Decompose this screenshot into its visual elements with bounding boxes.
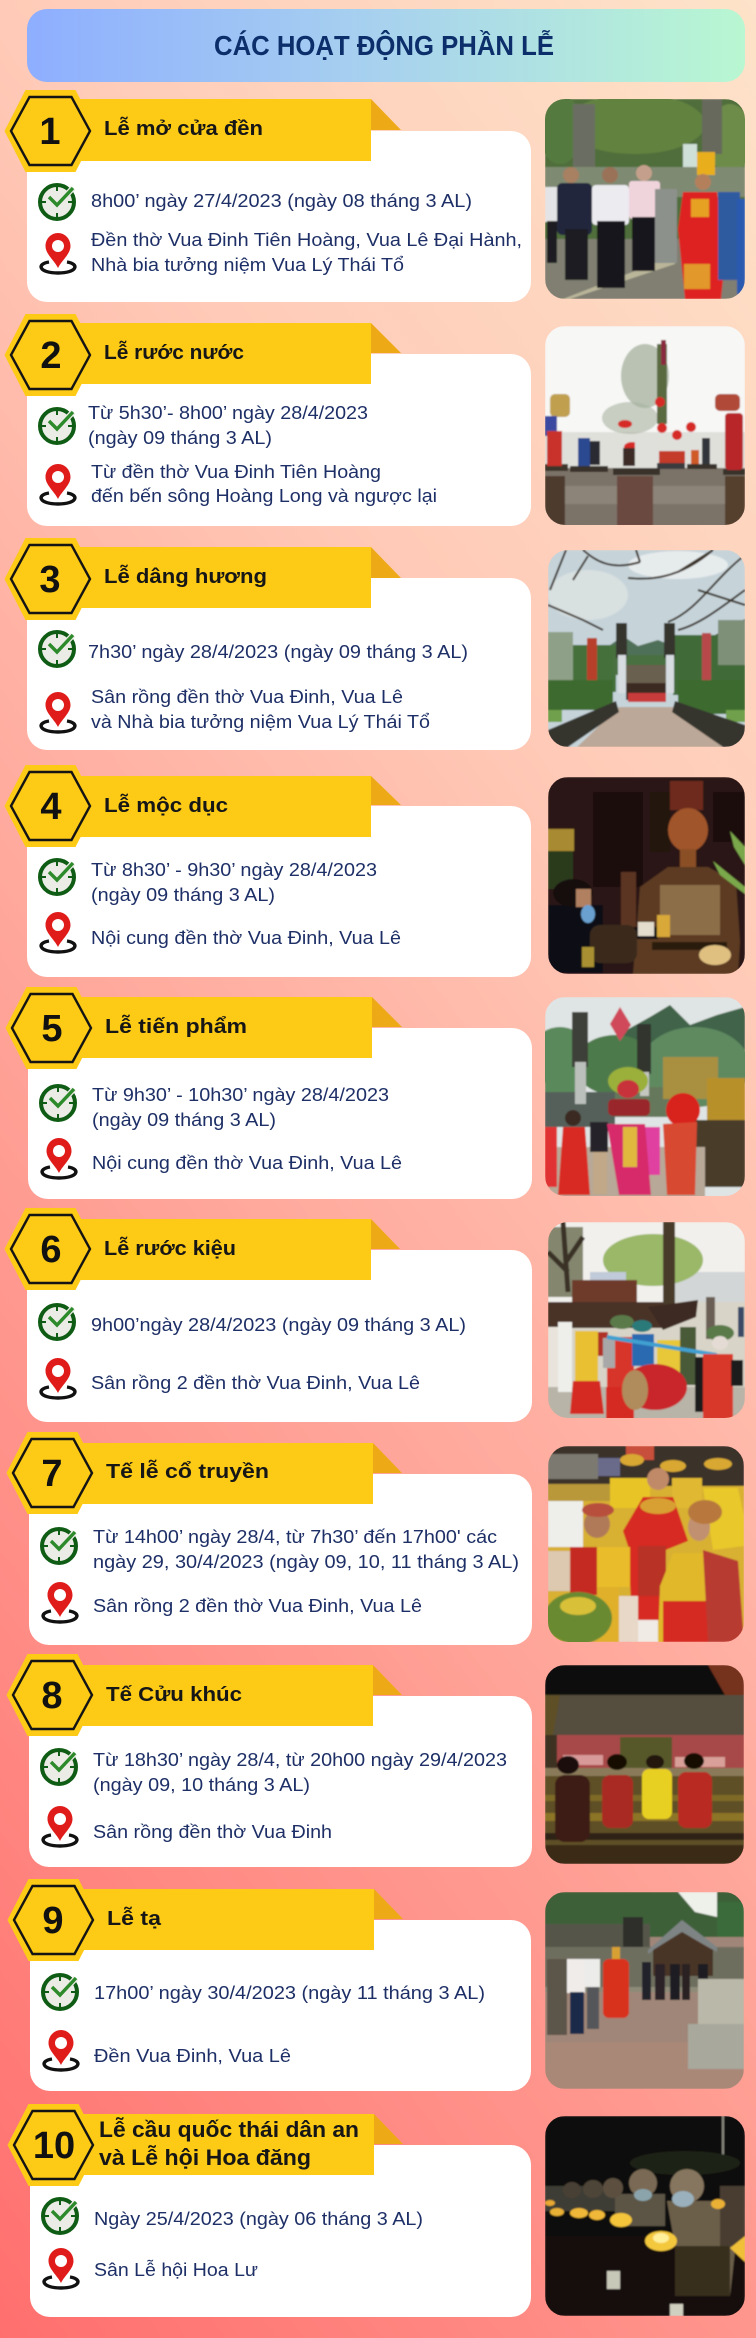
ribbon: [60, 99, 371, 161]
ribbon fold: [371, 776, 401, 805]
location text: [91, 462, 437, 506]
location text: Sân Lễ hội Hoa Lư: [94, 2259, 258, 2280]
ribbon: [60, 1219, 371, 1280]
ribbon fold: [374, 1889, 403, 1919]
panel: activity 6: [4, 1208, 745, 1422]
heading: Lễ cầu quốc thái dân an: [99, 2117, 359, 2142]
location text: Nhà bia tưởng niệm Vua Lý Thái Tổ: [91, 255, 404, 275]
photo: traditional ritual performers: [544, 1446, 744, 1644]
icon: location pin: [42, 1138, 76, 1178]
ribbon: [62, 1443, 373, 1504]
icon: clock: [40, 409, 74, 443]
heading: Lễ tiến phẩm: [105, 1014, 247, 1038]
time text: (ngày 09 tháng 3 AL): [88, 428, 272, 448]
panel: activity 3: [4, 538, 745, 750]
heading: Lễ mộc dục: [104, 793, 228, 817]
time text: Từ 14h00’ ngày 28/4, từ 7h30’ đến 17h00' các: [93, 1527, 497, 1547]
heading: Lễ rước nước: [104, 340, 244, 364]
icon: location pin: [44, 2030, 78, 2070]
icon: location pin: [44, 2248, 78, 2288]
icon: clock: [40, 632, 74, 666]
number badge: 10: [33, 2125, 75, 2167]
ribbon fold: [372, 997, 402, 1027]
card: [29, 1696, 532, 1867]
ribbon: [63, 1889, 374, 1950]
panel: activity 4: [4, 765, 745, 977]
icon: location pin: [41, 1358, 75, 1398]
time text: 7h30’ ngày 28/4/2023 (ngày 09 tháng 3 AL): [88, 642, 468, 662]
number badge: 2: [40, 335, 62, 377]
number badge: [6, 1432, 98, 1514]
ribbon fold: [373, 1443, 402, 1473]
location text: Đền thờ Vua Đinh Tiên Hoàng, Vua Lê Đại Hành,: [91, 230, 522, 250]
number badge: [6, 1654, 98, 1736]
icon: clock: [43, 2199, 77, 2233]
location text: Từ đền thờ Vua Đinh Tiên Hoàng: [91, 462, 381, 482]
time text: Từ 8h30’ - 9h30’ ngày 28/4/2023: [91, 860, 377, 880]
number badge: 9: [42, 1900, 64, 1942]
heading: Lễ mở cửa đền: [104, 116, 263, 140]
card: [30, 1920, 531, 2091]
photo: offering procession: [530, 997, 750, 1197]
ribbon fold: [373, 1665, 402, 1695]
number badge: 3: [39, 559, 61, 601]
heading: Lễ rước kiệu: [104, 1236, 236, 1260]
location text: đến bến sông Hoàng Long và ngược lại: [91, 486, 437, 506]
location text: Sân rồng đền thờ Vua Đinh, Vua Lê: [91, 687, 403, 707]
number badge: 8: [41, 1675, 63, 1717]
number badge: 5: [41, 1008, 63, 1050]
icon: clock: [40, 1305, 74, 1339]
icon: clock: [42, 1529, 76, 1563]
heading: Lễ tạ: [107, 1906, 162, 1930]
ribbon fold: [371, 547, 401, 578]
location text: Nội cung đền thờ Vua Đinh, Vua Lê: [91, 928, 401, 948]
ribbon: [60, 776, 371, 837]
card: [27, 578, 531, 750]
number badge: 1: [39, 111, 61, 153]
heading: Tế lễ cổ truyền: [106, 1459, 269, 1483]
icon: location pin: [43, 1582, 77, 1622]
icon: location pin: [43, 1806, 77, 1846]
panel: activity 7: [6, 1432, 744, 1645]
time text: Từ 18h30’ ngày 28/4, từ 20h00 ngày 29/4/2023: [93, 1750, 507, 1770]
photo: officials and costumed man at temple: [538, 94, 752, 299]
location text: và Nhà bia tưởng niệm Vua Lý Thái Tổ: [91, 712, 430, 732]
number badge: [4, 314, 96, 396]
icon: location pin: [41, 692, 75, 732]
time text: 17h00’ ngày 30/4/2023 (ngày 11 tháng 3 AL): [94, 1983, 485, 2003]
panel: activity 10: [8, 2104, 745, 2317]
time text: (ngày 09 tháng 3 AL): [92, 1110, 276, 1130]
card: [27, 131, 531, 302]
location text: Đền Vua Đinh, Vua Lê: [94, 2046, 291, 2066]
icon: location pin: [41, 912, 75, 952]
number badge: [8, 2104, 100, 2186]
card: [29, 1474, 532, 1645]
icon: clock: [40, 860, 74, 894]
photo: water procession on boats: [545, 326, 745, 526]
ribbon fold: [371, 323, 401, 353]
icon: clock: [43, 1975, 77, 2009]
card: [27, 1250, 532, 1422]
location text: Sân rồng đền thờ Vua Đinh: [93, 1822, 332, 1842]
number badge: 4: [40, 786, 62, 828]
ribbon: [63, 2114, 374, 2175]
number badge: 7: [41, 1453, 63, 1495]
time text: Từ 5h30’- 8h00’ ngày 28/4/2023: [88, 403, 368, 423]
time text: (ngày 09 tháng 3 AL): [91, 885, 275, 905]
photo: nuns holding lotus lanterns at night: [545, 2116, 745, 2316]
heading: Tế Cửu khúc: [106, 1684, 242, 1706]
location text: Nội cung đền thờ Vua Đinh, Vua Lê: [92, 1153, 402, 1173]
location text: Sân rồng 2 đền thờ Vua Đinh, Vua Lê: [91, 1373, 420, 1393]
icon: location pin: [41, 464, 75, 504]
card: [28, 1028, 532, 1199]
icon: clock: [42, 1750, 76, 1784]
heading: và Lễ hội Hoa đăng: [99, 2145, 311, 2170]
time text: Ngày 25/4/2023 (ngày 06 tháng 3 AL): [94, 2209, 423, 2229]
ribbon fold: [374, 2114, 403, 2144]
number badge: 6: [40, 1229, 62, 1271]
number badge: [4, 1208, 96, 1290]
time text: 9h00’ngày 28/4/2023 (ngày 09 tháng 3 AL): [91, 1315, 466, 1335]
icon: clock: [41, 1086, 75, 1120]
location text: [91, 687, 430, 732]
panel: activity 1: [4, 90, 752, 302]
heading: Lễ dâng hương: [104, 564, 267, 588]
time text: [91, 860, 377, 905]
panel: activity 8: [6, 1654, 744, 1867]
card: [30, 2145, 531, 2317]
card: [27, 354, 531, 526]
photo: temple gate and bridge: [548, 550, 745, 747]
location text: [91, 230, 522, 275]
photo: bathing the statue: [548, 777, 745, 974]
heading: [99, 2117, 359, 2170]
panel: activity 5: [6, 987, 750, 1199]
location text: Sân rồng 2 đền thờ Vua Đinh, Vua Lê: [93, 1596, 422, 1616]
card: [27, 806, 531, 977]
ribbon: [61, 997, 372, 1058]
number badge: [6, 987, 98, 1069]
ribbon: [62, 1665, 373, 1726]
time text: [88, 403, 368, 448]
time text: ngày 29, 30/4/2023 (ngày 09, 10, 11 tháng 3 AL): [93, 1552, 519, 1572]
time text: [93, 1527, 519, 1572]
icon: location pin: [41, 233, 75, 273]
number badge: [4, 538, 96, 620]
number badge: [8, 1879, 100, 1961]
ribbon: [60, 323, 371, 384]
photo: closing ritual in temple courtyard: [545, 1892, 744, 2089]
title: CÁC HOẠT ĐỘNG PHẦN LỄ: [214, 29, 554, 61]
time text: [93, 1750, 507, 1795]
ribbon fold: [371, 99, 401, 130]
icon: clock: [40, 185, 74, 219]
ribbon fold: [371, 1219, 400, 1249]
photo: night ritual dance: [545, 1665, 744, 1864]
time text: 8h00’ ngày 27/4/2023 (ngày 08 tháng 3 AL): [91, 191, 472, 211]
panel: activity 2: [4, 314, 745, 526]
time text: [92, 1085, 389, 1130]
photo: palanquin procession with drum: [548, 1222, 745, 1419]
ribbon: [60, 547, 371, 608]
title banner: [27, 9, 745, 82]
number badge: [4, 90, 96, 172]
time text: Từ 9h30’ - 10h30’ ngày 28/4/2023: [92, 1085, 389, 1105]
panel: activity 9: [8, 1879, 744, 2091]
time text: (ngày 09, 10 tháng 3 AL): [93, 1775, 310, 1795]
number badge: [4, 765, 96, 847]
